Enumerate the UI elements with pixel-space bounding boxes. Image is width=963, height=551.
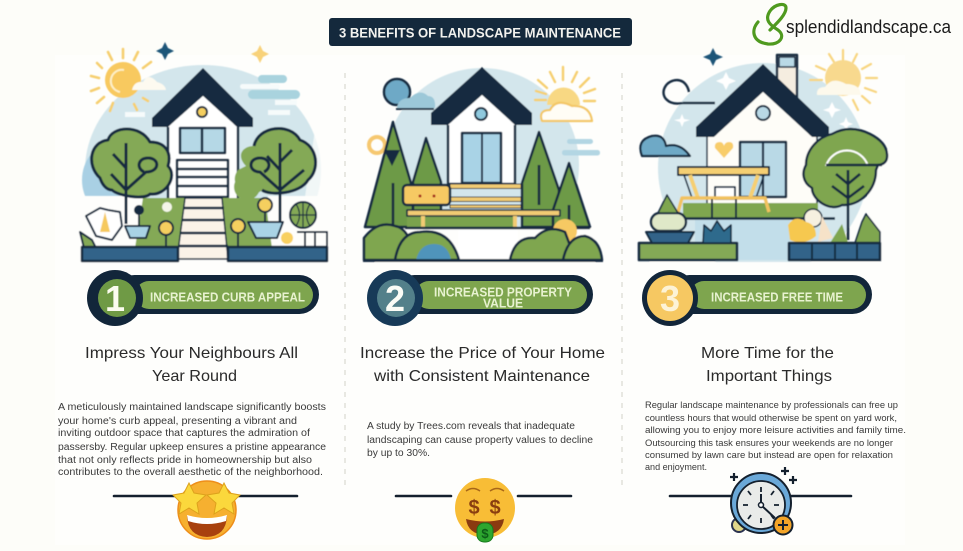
bench bbox=[403, 184, 590, 228]
heading 2 bbox=[360, 345, 605, 385]
house bbox=[431, 67, 532, 184]
body text 1: inviting outdoor space that captures the admiration of bbox=[58, 428, 310, 439]
badge 1: 1 bbox=[105, 278, 125, 319]
tree right bbox=[234, 129, 316, 224]
icon: navy sparkle bbox=[703, 48, 723, 66]
icon: navy sparkle bbox=[156, 42, 174, 60]
sparkles bbox=[674, 72, 853, 131]
body text 1 bbox=[58, 402, 326, 478]
title bbox=[329, 18, 632, 46]
tree trunks bbox=[393, 165, 569, 227]
path bbox=[177, 198, 228, 259]
clouds bbox=[640, 80, 715, 156]
body text 3: Outsourcing this task ensures your weekends are no longer bbox=[645, 438, 893, 449]
icon: money-mouth emoji: $ bbox=[468, 497, 480, 519]
icon: ring bbox=[369, 137, 385, 153]
body text 1: your home's curb appeal, presenting a vibrant and bbox=[58, 416, 297, 427]
water bbox=[695, 220, 790, 260]
body text 1: passersby. Regular upkeep ensures a pristine appearance bbox=[58, 442, 326, 453]
body text 1: A meticulously maintained landscape significantly boosts bbox=[58, 402, 326, 413]
badge 1: INCREASED CURB APPEAL bbox=[150, 290, 305, 304]
icon: money-mouth emoji: $ bbox=[481, 526, 489, 541]
fence and base bbox=[82, 232, 327, 261]
house bbox=[696, 64, 829, 218]
illustration: house 1 bbox=[75, 42, 335, 285]
badge 2: INCREASED PROPERTY bbox=[434, 284, 572, 300]
heading 3: More Time for the bbox=[701, 345, 834, 362]
pergola bbox=[678, 167, 835, 218]
tree left bbox=[92, 129, 172, 224]
icon: moon cloud bbox=[384, 79, 435, 109]
icon: yellow sparkle bbox=[251, 45, 269, 63]
body text 2: landscaping can cause property values to decline bbox=[367, 435, 593, 446]
badge 3: INCREASED FREE TIME bbox=[711, 290, 843, 304]
icon: money-mouth emoji: $ bbox=[489, 497, 501, 519]
body text 2: A study by Trees.com reveals that inadequate bbox=[367, 421, 575, 432]
illustration: house 2 bbox=[363, 67, 603, 278]
body text 3: allowing you to enjoy more leisure activities and family time. bbox=[645, 425, 906, 436]
lawn bbox=[135, 198, 272, 248]
heading 2: Increase the Price of Your Home bbox=[360, 345, 605, 362]
heading 1: Impress Your Neighbours All bbox=[85, 345, 298, 362]
icon: clock bbox=[670, 467, 851, 534]
badge 3: 3 bbox=[660, 278, 680, 319]
icon: sun cloud bbox=[810, 50, 877, 110]
bushes bbox=[363, 219, 603, 260]
body text 1: that not only reflects pride in homeownership but also bbox=[58, 455, 312, 466]
badge 3 bbox=[642, 270, 872, 326]
icon: star-eyes emoji bbox=[114, 481, 297, 539]
body text 3: and enjoyment. bbox=[645, 462, 707, 473]
icon: sun bbox=[91, 49, 166, 111]
flowers bbox=[788, 209, 880, 243]
icon: money-mouth emoji bbox=[396, 478, 571, 542]
badge 2: 2 bbox=[385, 278, 405, 319]
wind bbox=[562, 139, 600, 156]
house bbox=[152, 68, 253, 200]
badge 2: VALUE bbox=[483, 296, 523, 310]
clouds bbox=[125, 75, 300, 117]
body text 2 bbox=[367, 421, 593, 459]
title: 3 BENEFITS OF LANDSCAPE MAINTENANCE bbox=[339, 26, 621, 40]
body text 3: countless hours that would otherwise be spent on yard work, bbox=[645, 413, 897, 424]
body text 3: Regular landscape maintenance by professionals can free up bbox=[645, 400, 898, 411]
body text 3: consumed by lawn care but instead are open for relaxation bbox=[645, 450, 893, 461]
flowers and plants bbox=[80, 198, 316, 248]
planters bbox=[639, 195, 880, 260]
heading 1: Year Round bbox=[152, 368, 237, 385]
badge 2 bbox=[367, 270, 593, 326]
chimney bbox=[777, 55, 797, 100]
heading 2: with Consistent Maintenance bbox=[373, 368, 590, 385]
heading 1 bbox=[85, 345, 298, 385]
icon: sun cloud bbox=[535, 67, 595, 121]
body text 1: contributes to the overall aesthetic of the neighborhood. bbox=[58, 467, 323, 478]
logo: splendidlandscape.ca bbox=[786, 17, 952, 37]
illustration: house 3 bbox=[639, 48, 898, 292]
badge 1 bbox=[87, 270, 319, 326]
body text 2: by up to 30%. bbox=[367, 448, 430, 459]
logo bbox=[754, 4, 952, 44]
trees bbox=[365, 122, 590, 227]
body text 3 bbox=[645, 400, 906, 473]
tree bbox=[804, 129, 887, 240]
heading 3: Important Things bbox=[706, 368, 832, 385]
heading 3 bbox=[701, 345, 834, 385]
